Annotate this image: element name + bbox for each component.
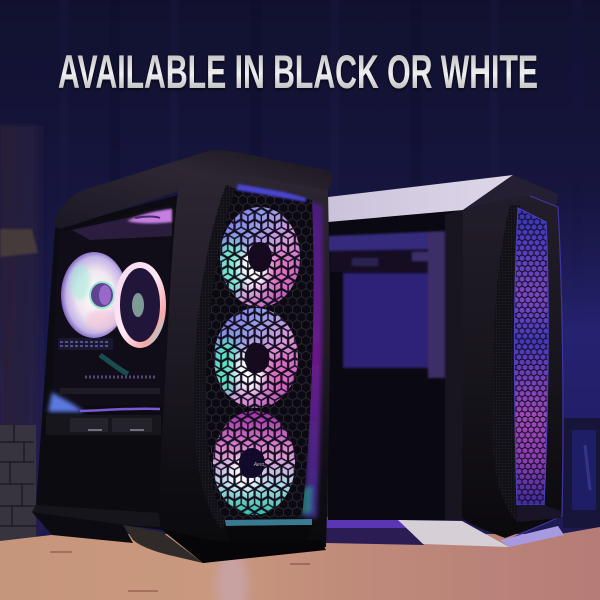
white PC case (322, 175, 564, 547)
fan hub logo: Aero (253, 462, 264, 468)
black case base (165, 530, 326, 563)
white case carbon strip (492, 205, 520, 520)
white case bottom sill (516, 505, 561, 522)
lamp shade at left (0, 229, 38, 257)
black top panel (53, 150, 332, 229)
lower rail (32, 505, 160, 527)
black carbon strip (194, 185, 240, 530)
floor glow under white case (322, 516, 424, 545)
RGB ring fan (117, 265, 163, 345)
grey angled foot (123, 525, 203, 563)
blue LED glow in case (48, 392, 84, 412)
dark shelf at right (563, 418, 600, 528)
black case window interior (52, 204, 172, 405)
white wedge foot (398, 520, 509, 547)
white case front frame (462, 196, 563, 538)
white case tinted window (328, 231, 445, 378)
front bottom bezel (226, 525, 312, 546)
RGB strip (80, 409, 160, 411)
blue top strip (236, 184, 306, 202)
white case blue rim light (514, 196, 563, 537)
wooden table (0, 527, 600, 600)
black case teal reflection (297, 486, 313, 516)
black front mesh panel (206, 184, 314, 520)
white case body and window (328, 208, 468, 520)
front fan 1 (220, 207, 300, 307)
purple wedge foot (500, 526, 564, 547)
stone wall at left (0, 425, 36, 543)
white case dark top cap (463, 175, 558, 210)
bottom light strip (225, 519, 312, 526)
RGB radiator fan (61, 252, 127, 338)
black PC case (32, 150, 332, 563)
black front frame (158, 176, 330, 563)
black case rear and bottom body (32, 195, 178, 543)
black case purple right rim (304, 200, 323, 518)
front fan 3 (213, 411, 295, 515)
white case front mesh (514, 208, 548, 505)
front fan 2 (214, 308, 298, 408)
drive bays shroud (46, 415, 161, 435)
lower side panel (43, 435, 160, 512)
white top panel (328, 175, 513, 222)
